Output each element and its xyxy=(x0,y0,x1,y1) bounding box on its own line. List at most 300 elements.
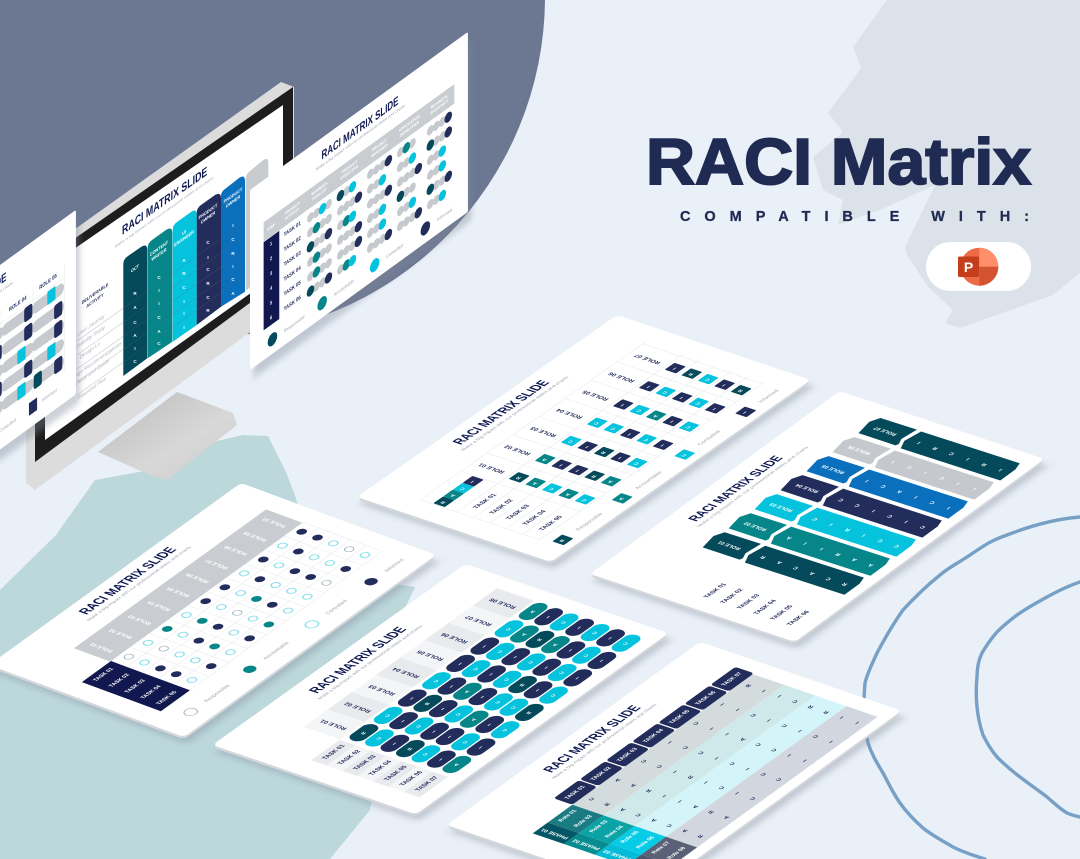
screen column headers and letters: C xyxy=(157,275,161,280)
table letters: C xyxy=(770,747,779,752)
role header blocks: Role 02 xyxy=(573,815,594,828)
RACI squares: R xyxy=(590,474,598,478)
screen task list xyxy=(72,282,122,402)
table letters: C xyxy=(656,764,664,768)
legend: Informed xyxy=(758,389,781,403)
role header blocks: Role 03 xyxy=(588,820,610,833)
task labels: TASK 05 xyxy=(538,515,565,532)
slide title: RACI MATRIX SLIDE xyxy=(305,625,410,695)
task labels: TASK 02 xyxy=(488,498,516,515)
background: grey brush shape xyxy=(813,0,1080,328)
RACI pills: I xyxy=(481,644,488,648)
legend: Accountable xyxy=(262,641,291,660)
RACI pills: I xyxy=(486,722,493,726)
RACI squares: C xyxy=(635,408,644,413)
table letters: I xyxy=(828,739,835,743)
stripe letters: I xyxy=(998,467,1004,472)
RACI pills: C xyxy=(582,653,591,657)
RACI pills: I xyxy=(440,707,446,711)
table letters: C xyxy=(728,761,737,765)
screen column headers and letters: I xyxy=(183,325,185,330)
RACI squares: I xyxy=(626,432,633,436)
RACI squares: R xyxy=(736,388,745,393)
table letters: I xyxy=(667,740,674,744)
screen column headers and letters: R xyxy=(182,271,186,276)
RACI pills: A xyxy=(470,717,478,721)
subtitle: compatible with: COMPATIBLE WITH: xyxy=(680,209,1029,225)
panel: floating slide left of monitor xyxy=(0,210,80,561)
table letters: A xyxy=(739,736,748,741)
role header blocks: Role 04 xyxy=(604,825,626,839)
table header band: ACTIVITY xyxy=(285,206,300,221)
RACI squares: A xyxy=(540,457,549,462)
screen task list: Visual and Guide xyxy=(75,358,109,388)
RACI pills: I xyxy=(567,648,574,652)
slide title: RACI MATRIX SLIDE xyxy=(322,94,399,163)
screen column headers and letters: R xyxy=(231,251,235,256)
RACI pills: I xyxy=(438,757,444,761)
table letters: R xyxy=(697,833,705,838)
screen column headers and letters: C xyxy=(206,240,210,245)
role header blocks xyxy=(533,805,697,859)
RACI pills: R xyxy=(535,637,544,642)
table letters: I xyxy=(761,688,768,692)
role header strip: ROLE 05 xyxy=(415,649,446,662)
task labels: TASK 05 xyxy=(383,765,410,782)
header RACI strip: R xyxy=(439,500,448,504)
stripe letters: I xyxy=(955,481,962,485)
table letters: I xyxy=(709,726,715,730)
RACI pills: I xyxy=(598,658,605,662)
RACI pills: C xyxy=(384,713,392,718)
stripe letters: I xyxy=(916,440,923,445)
header RACI strip xyxy=(433,476,484,507)
legend: Accountable xyxy=(334,277,355,299)
RACI pills: A xyxy=(551,642,560,647)
task header block: TASK 02 xyxy=(108,673,131,688)
table header band xyxy=(264,84,454,242)
screen column headers and letters: A xyxy=(157,329,161,334)
role labels: ROLE 07 xyxy=(632,353,663,365)
stripe letters: I xyxy=(819,546,825,551)
table letters: C xyxy=(635,812,643,817)
screen column headers and letters: C xyxy=(133,359,137,364)
table letters: I xyxy=(786,753,793,757)
screen column headers and letters xyxy=(131,186,242,364)
role header band: ROLE 08 xyxy=(223,544,250,556)
background: teal brush shape xyxy=(0,435,415,859)
screen column headers and letters: I xyxy=(183,311,185,316)
RACI pills: R xyxy=(359,730,368,735)
RACI pills: C xyxy=(472,666,480,671)
task header block: TASK 01 xyxy=(92,667,116,682)
legend xyxy=(181,557,407,717)
stripe letters: I xyxy=(965,457,972,461)
role labels: ROLE 05 xyxy=(821,464,847,474)
stripe letters: C xyxy=(853,503,862,507)
table header band: PROJECT xyxy=(285,200,300,216)
RACI squares: C xyxy=(684,424,693,429)
RACI pills: I xyxy=(457,661,464,665)
RACI squares: R xyxy=(687,371,696,376)
active RACI markers xyxy=(0,281,62,419)
RACI pills: I xyxy=(545,615,552,619)
panel: slide with dot matrix xyxy=(0,483,439,744)
screen slide title: RACI MATRIX SLIDE xyxy=(122,164,207,238)
RACI pills: C xyxy=(375,736,384,740)
RACI squares: C xyxy=(642,437,650,442)
table letters: A xyxy=(692,804,700,809)
screen column headers and letters: OWNER xyxy=(201,210,216,225)
legend: Informed xyxy=(383,558,406,573)
table letters: C xyxy=(775,777,784,781)
stripe letters: C xyxy=(919,524,927,529)
role labels: ROLE 03 xyxy=(769,502,795,512)
role labels xyxy=(9,273,57,314)
task tabs: TASK 03 xyxy=(616,747,640,762)
panel: slide with task tabs and coloured bands xyxy=(447,642,905,859)
screen task list: Usability Study xyxy=(75,324,105,352)
table letters: I xyxy=(734,791,741,795)
role header strip: ROLE 07 xyxy=(463,614,494,627)
role header blocks: PHASE 01 xyxy=(540,827,571,840)
table letters: C xyxy=(781,723,789,728)
stripe letters: C xyxy=(811,516,820,521)
RACI squares: C xyxy=(661,390,670,394)
screen column headers and letters: CONTENT xyxy=(150,239,168,257)
RACI squares: C xyxy=(694,401,702,405)
RACI pills: I xyxy=(488,672,495,676)
table header band: DEVELOPER xyxy=(400,119,419,138)
role header strip: ROLE 01 xyxy=(318,718,349,731)
stripe letters: C xyxy=(877,538,885,543)
badge: PowerPoint pill xyxy=(926,242,1031,291)
RACI pills: C xyxy=(415,724,423,728)
RACI pills: I xyxy=(477,745,484,749)
screen column headers and letters: C xyxy=(133,320,137,325)
step numbers column: 3 xyxy=(270,270,272,278)
screen column headers and letters: C xyxy=(157,315,161,320)
table letters: R xyxy=(603,801,612,806)
task labels: TASK 07 xyxy=(414,775,441,792)
table letters: C xyxy=(666,823,674,828)
RACI pills: C xyxy=(494,699,503,704)
screen task list: User Journey xyxy=(78,313,105,338)
RACI squares: A xyxy=(564,492,572,496)
task labels: TASK 04 xyxy=(753,599,779,615)
table header band: EXECUTIVE xyxy=(341,163,359,181)
legend xyxy=(0,383,57,438)
task labels: TASK 04 xyxy=(284,265,301,283)
RACI squares: I xyxy=(721,383,727,387)
slide subtitle: Make a big impact with our professional slides and charts xyxy=(85,545,193,621)
panel: slide with role stripes xyxy=(590,391,1048,649)
task labels: TASK 05 xyxy=(284,280,301,298)
legend: Responsible xyxy=(284,313,305,335)
table letters: I xyxy=(797,728,804,733)
step numbers column: 2 xyxy=(270,255,272,263)
RACI squares: C xyxy=(566,439,575,444)
RACI pills: I xyxy=(409,696,415,700)
panel: floating slide right of monitor xyxy=(250,32,472,378)
role labels: ROLE 07 xyxy=(872,426,899,436)
stripe letters: C xyxy=(948,451,956,456)
stripe letters: I xyxy=(903,519,910,523)
role header strip: ROLE 03 xyxy=(366,684,397,696)
role header blocks: Role 05 xyxy=(620,831,641,844)
RACI pills: I xyxy=(543,665,550,669)
RACI squares: I xyxy=(671,366,678,370)
stripe letters: A xyxy=(785,535,794,540)
RACI pills: I xyxy=(479,694,486,699)
screen column headers and letters: C xyxy=(157,341,161,346)
task labels: TASK 03 xyxy=(284,250,301,269)
stripe letters: C xyxy=(792,565,801,570)
screen column headers and letters: PRODUCT xyxy=(199,202,217,221)
task tabs xyxy=(554,667,754,805)
stripe letters: I xyxy=(871,508,877,512)
RACI pills xyxy=(346,601,644,775)
task header block: TASK 05 xyxy=(155,691,179,706)
stripe letters: R xyxy=(834,552,843,556)
RACI squares: I xyxy=(558,463,564,467)
role labels: ROLE 04 xyxy=(9,295,26,314)
role header band xyxy=(74,509,302,662)
RACI squares: C xyxy=(703,377,712,382)
screen column headers and letters: I xyxy=(232,223,234,228)
task labels: TASK 04 xyxy=(521,509,549,526)
RACI pills: I xyxy=(431,729,438,733)
table letters: C xyxy=(760,771,768,776)
role labels: ROLE 02 xyxy=(502,444,533,456)
task labels: TASK 06 xyxy=(786,610,812,626)
table letters: I xyxy=(714,756,720,760)
screen slide subtitle: Make a big impact with our professional slides and charts xyxy=(115,175,214,249)
legend: I xyxy=(742,410,748,414)
task header block xyxy=(82,661,190,711)
task tabs: TASK 01 xyxy=(564,785,587,800)
RACI pills: I xyxy=(576,625,583,629)
legend: Consulted xyxy=(386,242,403,261)
task tabs: TASK 04 xyxy=(642,728,666,743)
role header band: ROLE 09 xyxy=(242,531,269,542)
table letters: C xyxy=(755,742,763,747)
table header band: MANAGER xyxy=(371,142,388,159)
role stripes xyxy=(698,416,1022,595)
stripe letters: I xyxy=(946,506,952,510)
table letters: C xyxy=(588,796,597,801)
RACI pills: I xyxy=(391,741,398,745)
main title: RACI Matrix xyxy=(646,125,1031,198)
task labels: TASK 06 xyxy=(398,770,425,787)
RACI pills: C xyxy=(591,630,599,635)
RACI squares: R xyxy=(514,475,523,480)
table letters: C xyxy=(749,796,758,800)
table header band: PROJECT xyxy=(372,137,387,153)
stripe letters xyxy=(759,440,1005,586)
monitor xyxy=(26,82,294,490)
screen column headers and letters: C xyxy=(182,285,186,290)
stripe letters: C xyxy=(886,513,895,518)
panel: slide with pill matrix xyxy=(212,564,672,821)
slide subtitle: Make a big impact with our professional slides and charts xyxy=(316,103,405,172)
screen column headers and letters: UI xyxy=(182,229,186,236)
task labels: TASK 01 xyxy=(703,582,729,599)
legend: Consulted xyxy=(697,430,722,446)
RACI pills: C xyxy=(503,677,511,682)
task header block: TASK 04 xyxy=(140,684,164,700)
RACI pills: C xyxy=(421,751,430,756)
stripe letters: R xyxy=(759,554,768,559)
screen column headers and letters: R xyxy=(133,291,137,296)
table letters: C xyxy=(812,734,820,738)
legend xyxy=(268,203,452,349)
task labels: TASK 02 xyxy=(336,749,363,766)
role header strip: ROLE 02 xyxy=(342,701,373,713)
role labels: ROLE 04 xyxy=(795,483,821,493)
task labels xyxy=(472,493,565,532)
RACI squares: A xyxy=(651,413,660,418)
table letters: C xyxy=(791,699,800,703)
monitor stand xyxy=(98,392,237,480)
legend: R xyxy=(558,538,567,542)
RACI squares: A xyxy=(531,481,540,485)
role header strip: ROLE 04 xyxy=(391,666,422,679)
table letters: C xyxy=(640,758,649,763)
table letters: C xyxy=(718,785,727,790)
task labels xyxy=(284,220,301,313)
table header band: ARCHITECT xyxy=(430,97,449,116)
screen column headers and letters: I xyxy=(134,346,136,351)
role header band: ROLE 03 xyxy=(127,614,154,625)
table letters: A xyxy=(630,783,638,787)
legend: A xyxy=(617,496,626,501)
RACI squares: I xyxy=(711,407,718,411)
task tabs: TASK 07 xyxy=(720,672,744,687)
RACI pills: A xyxy=(529,609,537,614)
screen role columns xyxy=(123,159,268,376)
RACI squares: C xyxy=(592,421,601,425)
task labels: TASK 01 xyxy=(321,744,348,760)
slide subtitle: Make a big impact with our professional slides and charts xyxy=(316,624,424,700)
table letters: C xyxy=(697,750,706,755)
stripe letters: A xyxy=(867,562,876,567)
task labels: TASK 06 xyxy=(284,295,301,313)
monitor bezel xyxy=(35,87,293,462)
stripe letters: I xyxy=(802,541,809,545)
RACI pills: C xyxy=(560,620,568,624)
legend: Consulted xyxy=(324,599,349,615)
RACI pills: C xyxy=(504,626,513,631)
RACI pills: R xyxy=(423,701,432,706)
screen column headers and letters: I xyxy=(207,255,209,260)
role labels: ROLE 01 xyxy=(476,462,507,474)
role header blocks: Role 06 xyxy=(635,836,657,849)
RACI pills: I xyxy=(574,676,581,680)
legend: Responsible xyxy=(203,684,232,703)
role labels: ROLE 06 xyxy=(847,445,873,455)
header RACI strip: A xyxy=(449,493,457,497)
screen column headers and letters: I xyxy=(158,288,160,293)
screen task list: DELIVERABLE xyxy=(82,282,108,305)
legend: Accountable xyxy=(634,471,664,490)
table letters: A xyxy=(723,814,732,819)
RACI pills: A xyxy=(520,632,529,636)
legend: Responsible xyxy=(575,512,605,532)
role labels: ROLE 05 xyxy=(39,273,57,292)
RACI squares: C xyxy=(580,497,589,502)
task header block: TASK 03 xyxy=(124,679,147,694)
RACI pills: C xyxy=(432,678,441,683)
table letters: R xyxy=(645,788,654,793)
slide title: RACI MATRIX SLIDE xyxy=(684,454,786,523)
table letters: R xyxy=(745,683,753,687)
task labels: TASK 03 xyxy=(352,754,379,771)
table letters: A xyxy=(619,807,628,812)
role labels: ROLE 04 xyxy=(554,407,585,420)
step numbers column: 6 xyxy=(270,314,272,322)
table letters: I xyxy=(854,720,861,724)
role header strip: ROLE 08 xyxy=(487,597,518,610)
screen column headers and letters: C xyxy=(206,267,210,272)
task labels: TASK 02 xyxy=(284,235,301,254)
RACI circle chains xyxy=(310,117,448,291)
stripe letters: C xyxy=(893,543,901,548)
stripe letters: A xyxy=(896,489,904,494)
RACI pills: C xyxy=(509,705,518,709)
monitor screen xyxy=(45,105,283,440)
screen column headers and letters: PRODUCT xyxy=(224,186,242,205)
step numbers column: 5 xyxy=(270,299,272,307)
task labels: TASK 05 xyxy=(770,604,795,621)
role header band: ROLE 10 xyxy=(262,517,288,528)
screen column headers and letters: C xyxy=(206,295,210,300)
table letters: C xyxy=(750,712,758,717)
slide title: RACI MATRIX SLIDE xyxy=(449,379,553,446)
task tabs: TASK 06 xyxy=(694,691,718,706)
stripe letters: I xyxy=(972,486,978,491)
table letters: I xyxy=(839,715,845,719)
RACI pills: I xyxy=(534,688,541,692)
stripe letters: I xyxy=(923,470,929,474)
RACI pills: C xyxy=(527,660,535,664)
role header band: ROLE 04 xyxy=(145,600,173,611)
table letters: I xyxy=(661,793,668,798)
dot matrix xyxy=(121,528,372,684)
grid lines xyxy=(420,342,765,540)
table header band: ANALYST xyxy=(312,186,327,202)
role header band: ROLE 02 xyxy=(108,628,134,639)
stripe letters: I xyxy=(864,478,871,483)
stripe letters: A xyxy=(808,571,817,575)
task labels: TASK 04 xyxy=(367,759,394,776)
task labels: TASK 03 xyxy=(505,504,532,521)
RACI squares: I xyxy=(659,443,666,447)
RACI tracks xyxy=(0,290,60,425)
stripe letters: A xyxy=(851,557,859,562)
role labels: ROLE 06 xyxy=(606,371,637,383)
panel: slide with square RACI grid xyxy=(357,315,814,569)
stripe letters: I xyxy=(913,495,920,499)
table letters: R xyxy=(822,709,831,714)
role labels: ROLE 05 xyxy=(580,389,611,401)
RACI squares: I xyxy=(584,445,590,449)
table letters: I xyxy=(672,769,679,773)
RACI squares: I xyxy=(669,419,675,423)
table letters: I xyxy=(766,718,773,722)
screen column headers and letters: OCT xyxy=(131,263,139,274)
header RACI strip: C xyxy=(458,486,467,491)
